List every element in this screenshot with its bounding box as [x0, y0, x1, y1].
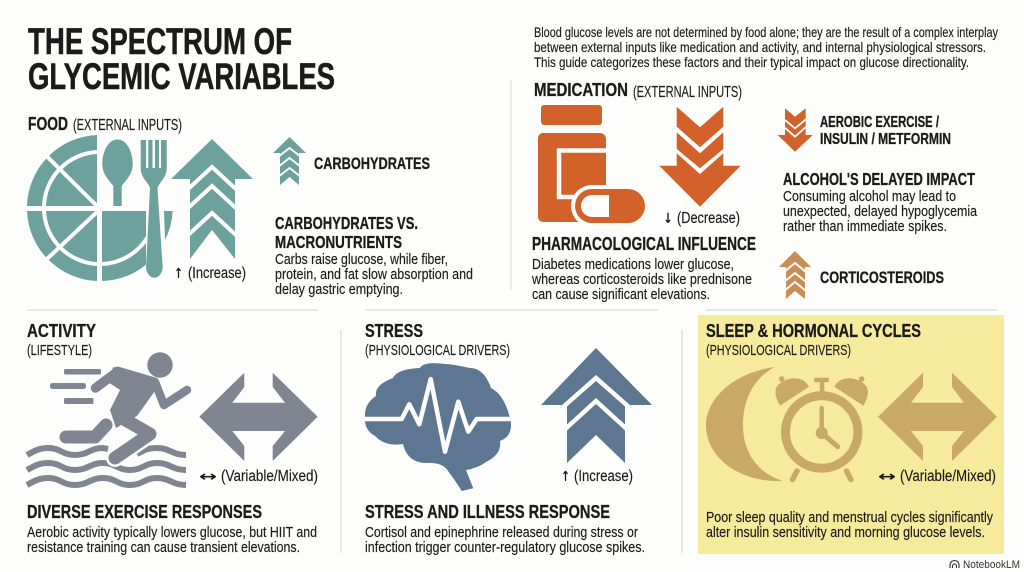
title [28, 21, 335, 97]
aerobic exercise insulin metformin label: INSULIN / METFORMIN [820, 131, 951, 148]
pharmacological influence text: can cause significant elevations. [532, 287, 710, 303]
food heading: (EXTERNAL INPUTS) [73, 117, 182, 134]
decrease label: (Decrease) [677, 210, 740, 227]
decrease label: ↓ [663, 211, 673, 227]
sleep description text: alter insulin sensitivity and morning glucose levels. [706, 525, 985, 541]
increase label: ↑ [561, 469, 570, 485]
alcohol delayed impact text: rather than immediate spikes. [783, 219, 947, 235]
panel: medication [531, 79, 978, 303]
notebooklm watermark: NotebookLM [963, 559, 1020, 571]
icon: large increase arrow [171, 139, 253, 259]
alcohol delayed impact text: Consuming alcohol may lead to [783, 189, 956, 205]
variable label: (Variable/Mixed) [900, 468, 996, 485]
increase label: (Increase) [188, 265, 246, 282]
carbohydrates vs macronutrients text: Carbs raise glucose, while fiber, [275, 252, 448, 268]
pharmacological influence text: PHARMACOLOGICAL INFLUENCE [532, 233, 756, 254]
icon: large decrease arrow [659, 107, 741, 207]
increase label [174, 265, 246, 282]
decrease label [663, 210, 740, 227]
icon: runner in water [27, 352, 187, 485]
panel: activity [27, 321, 318, 556]
stress and illness response text: STRESS AND ILLNESS RESPONSE [365, 501, 610, 522]
diverse exercise responses text: Aerobic activity typically lowers glucose, but HIIT and [27, 525, 317, 541]
title: GLYCEMIC VARIABLES [28, 56, 335, 97]
stress and illness response text: Cortisol and epinephrine released during stress or [365, 525, 638, 541]
icon: variable double arrow [199, 373, 318, 461]
corticosteroids label: CORTICOSTEROIDS [820, 269, 944, 287]
food heading: FOOD [28, 113, 68, 134]
icon: small increase arrow [273, 137, 306, 185]
variable label: ↔ [878, 469, 896, 485]
icon: crescent moon [706, 367, 783, 481]
carbohydrates vs macronutrients text: MACRONUTRIENTS [275, 232, 402, 252]
activity heading [27, 321, 96, 359]
intro text [534, 24, 998, 70]
alcohol delayed impact text [783, 169, 978, 235]
pharmacological influence text: Diabetes medications lower glucose, [532, 257, 734, 273]
sleep heading [706, 321, 921, 359]
food heading [28, 113, 182, 134]
icon: large increase arrow [541, 348, 652, 463]
stress and illness response text [365, 501, 645, 556]
stress and illness response text: infection trigger counter-regulatory glucose spikes. [365, 540, 645, 556]
carbohydrates vs macronutrients text: CARBOHYDRATES VS. [275, 213, 418, 233]
medication heading: (EXTERNAL INPUTS) [633, 84, 742, 101]
icon: variable double arrow [878, 373, 997, 461]
activity heading: ACTIVITY [27, 321, 96, 341]
icon: pill bottle and capsule [538, 105, 649, 227]
aerobic exercise insulin metformin label [820, 114, 951, 148]
stress heading [365, 321, 510, 359]
alcohol delayed impact text: unexpected, delayed hypoglycemia [783, 204, 978, 220]
sleep heading: (PHYSIOLOGICAL DRIVERS) [706, 342, 851, 359]
medication heading: MEDICATION [534, 79, 628, 100]
icon: small corticosteroid increase arrow [779, 251, 811, 299]
sleep description text [706, 510, 994, 541]
icon: alarm clock [775, 376, 868, 480]
carbohydrates vs macronutrients text: protein, and fat slow absorption and [275, 267, 473, 283]
carbohydrates vs macronutrients text [275, 213, 473, 298]
variable label: (Variable/Mixed) [221, 468, 318, 485]
diverse exercise responses text: DIVERSE EXERCISE RESPONSES [27, 501, 262, 522]
carbohydrates vs macronutrients text: delay gastric emptying. [275, 282, 403, 298]
variable label: ↔ [199, 469, 217, 485]
medication heading [534, 79, 742, 101]
diverse exercise responses text [27, 501, 317, 556]
increase label: (Increase) [574, 468, 633, 485]
aerobic exercise insulin metformin label: AEROBIC EXERCISE / [820, 114, 940, 131]
diverse exercise responses text: resistance training can cause transient elevations. [27, 540, 300, 556]
title: THE SPECTRUM OF [28, 21, 292, 62]
panel: sleep and hormonal cycles [698, 315, 1004, 554]
sleep heading: SLEEP & HORMONAL CYCLES [706, 321, 921, 341]
icon: small decrease arrow [778, 108, 813, 152]
stress heading: STRESS [365, 321, 423, 341]
panel: stress [364, 321, 652, 556]
pharmacological influence text [531, 233, 756, 303]
activity heading: (LIFESTYLE) [27, 342, 92, 359]
carbohydrates label: CARBOHYDRATES [314, 155, 430, 173]
stress heading: (PHYSIOLOGICAL DRIVERS) [365, 342, 510, 359]
pharmacological influence text: whereas corticosteroids like prednisone [531, 272, 752, 288]
icon: plate with spoon and fork [27, 135, 173, 281]
increase label: ↑ [174, 266, 183, 282]
icon: brain with pulse [364, 363, 512, 491]
panel: food [27, 113, 473, 298]
